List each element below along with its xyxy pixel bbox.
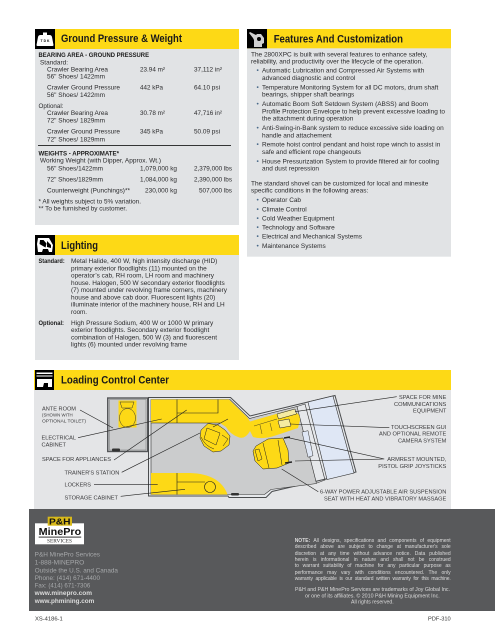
standard lighting text: room. <box>71 309 87 316</box>
icon: control center <box>35 370 54 390</box>
contact details: P&H MinePro Services <box>35 552 100 559</box>
main cab shell <box>148 396 356 498</box>
bearing area table: Crawler Ground Pressure <box>47 85 120 92</box>
note text block: to warrant suitability of machine for any particular purpose as <box>295 563 451 569</box>
features list <box>256 68 445 173</box>
weights table: Counterweight (Punchings)** <box>47 187 130 194</box>
trademark notice <box>295 587 450 606</box>
features list: Profile Protection Envelope to help prevent excessive loading to <box>262 108 445 115</box>
bearing area table: 37,112 in² <box>194 67 223 74</box>
icon: weight: TDK <box>40 39 50 43</box>
standard lighting text: house. Halogen, 500 W secondary exterior floodlights <box>71 280 225 287</box>
bearing area table: 56" Shoes/ 1422mm <box>47 74 105 81</box>
label: electrical cabinet: CABINET <box>42 443 67 449</box>
standard lighting text: Standard: <box>38 258 65 265</box>
icon: weight <box>35 29 55 49</box>
heading: lighting: Lighting <box>61 240 98 252</box>
customization list: Technology and Software <box>262 225 335 232</box>
label: armrest joysticks: PISTOL GRIP JOYSTICKS <box>378 464 447 470</box>
features list: • <box>256 68 260 75</box>
customization list: • <box>256 206 260 213</box>
features list: advanced diagnostic and control <box>262 75 356 82</box>
features intro: The 2800XPC is built with several features to enhance safety, <box>251 51 427 58</box>
label: trainer's station: TRAINER'S STATION <box>64 470 119 476</box>
customization list: • <box>256 215 260 222</box>
bearing area table: 64.10 psi <box>194 85 221 92</box>
note text block <box>294 538 451 582</box>
optional lighting text <box>38 320 217 349</box>
label: ante room: (SHOWN WITH <box>42 412 73 417</box>
features intro: reliability, and productivity over the lifecycle of the operation. <box>251 59 423 66</box>
label: ante room <box>42 407 87 423</box>
bearing area table: Crawler Bearing Area <box>47 110 108 117</box>
contact details: Fax: (414) 671-7306 <box>35 583 91 590</box>
bearing area table: 50.09 psi <box>194 128 221 135</box>
customization intro <box>251 180 429 195</box>
bearing area table: Crawler Bearing Area <box>47 67 108 74</box>
customization list <box>256 197 363 250</box>
customization list: • <box>256 197 260 204</box>
contact details: 1-888-MINEPRO <box>35 560 84 567</box>
bearing area table: Optional: <box>38 103 64 110</box>
yellow console and cabinets <box>151 400 300 494</box>
leader lines <box>78 397 397 496</box>
customization intro: specific conditions in the following areas: <box>251 188 368 195</box>
weights table: 56" Shoes/1422mm <box>47 165 103 172</box>
weights table: 2,390,000 lbs <box>194 176 233 183</box>
features list: • <box>256 125 260 132</box>
label: ante room: ANTE ROOM <box>42 407 77 413</box>
logo: P&H MinePro Services <box>35 517 84 545</box>
optional lighting text: Optional: <box>38 320 64 327</box>
bearing area table: 23.94 m² <box>140 67 166 74</box>
customization list: Operator Cab <box>262 197 301 204</box>
label: ante room: OPTIONAL TOILET) <box>42 418 87 423</box>
weights table: 507,000 lbs <box>199 187 233 194</box>
features list: Temperature Monitoring System for all DC motors, drum shaft <box>262 84 438 91</box>
standard lighting text: (7) mounted under revolving frame corners, machinery <box>71 287 228 294</box>
features list: and dust repression <box>262 166 319 173</box>
features list: the attachment during operation <box>262 116 354 123</box>
optional lighting text: lights (6) mounted under revolving frame <box>71 342 187 349</box>
weights table: 1,084,000 kg <box>140 176 177 183</box>
standard lighting text: Metal Halide, 400 W, high intensity discharge (HID) <box>71 258 217 265</box>
footer band <box>29 509 495 611</box>
label: storage cabinet: STORAGE CABINET <box>64 496 119 502</box>
trainer's seat <box>200 424 230 452</box>
bearing area table: 72" Shoes/ 1829mm <box>47 117 105 124</box>
ante room <box>108 398 148 452</box>
diagram: cab floor plan <box>108 396 356 498</box>
weights table: WEIGHTS - APPROXIMATE* <box>38 151 120 158</box>
standard lighting text <box>38 258 228 316</box>
panel: loading control center <box>34 370 451 509</box>
bearing area table: 56" Shoes/ 1422mm <box>47 92 105 99</box>
customization list: Cold Weather Equipment <box>262 215 334 222</box>
logo: P&H MinePro Services: MinePro <box>39 526 81 538</box>
features list: bearings, shipper shaft bearings <box>262 92 355 99</box>
icon: shovel <box>247 29 267 48</box>
label: space for mine communications equipment: SPACE FOR MINE <box>399 395 447 401</box>
document code right: PDF-310 <box>428 616 451 622</box>
document code left: XS-4186-1 <box>35 616 63 622</box>
bearing area table: 47,716 in² <box>194 110 223 117</box>
standard lighting text: primary exterior floodlights (11) mounted on the <box>71 265 207 272</box>
features list: • <box>256 101 260 108</box>
bearing area table: 72" Shoes/ 1829mm <box>47 136 105 143</box>
contact details <box>34 552 118 605</box>
features list: Automatic Lubrication and Compressed Air Systems with <box>262 68 425 75</box>
label: touchscreen gui: CAMERA SYSTEM <box>398 439 447 445</box>
label: air suspension seat <box>320 489 447 502</box>
icon: lighting <box>35 235 55 255</box>
contact details: www.phmining.com <box>34 598 95 605</box>
customization intro: The standard shovel can be customized for local and minesite <box>251 180 429 187</box>
contact details: www.minepro.com <box>34 590 92 597</box>
features list: Anti-Swing-in-Bank system to reduce excessive side loading on <box>262 125 444 132</box>
label: space for mine communications equipment: EQUIPMENT <box>413 409 447 415</box>
note text block: discretion at any time without advance notice. Data published <box>295 551 451 557</box>
panel: features and customization <box>247 29 451 257</box>
label: space for appliances: SPACE FOR APPLIANCES <box>42 457 111 463</box>
label: lockers: LOCKERS <box>64 483 91 489</box>
label: air suspension seat: 6-WAY POWER ADJUSTABLE AIR SUSPENSION <box>320 489 446 495</box>
panel: lighting <box>35 235 239 360</box>
customization list: • <box>256 243 260 250</box>
bearing area table: BEARING AREA - GROUND PRESSURE <box>38 52 149 59</box>
features list: • <box>256 142 260 149</box>
bearing area table: Standard: <box>40 59 68 66</box>
label: touchscreen gui: TOUCHSCREEN GUI <box>391 425 446 431</box>
footnotes <box>38 198 141 213</box>
note text block: warranty applicable is our standard written warranty for this machine. <box>295 576 451 582</box>
weights table: 230,000 kg <box>145 187 177 194</box>
features list: safe and efficient rope changeouts <box>262 149 362 156</box>
features list: Remote hoist control pendant and hoist rope winch to assist in <box>262 142 441 149</box>
weights table <box>38 151 233 194</box>
bearing area table: 345 kPa <box>140 128 163 135</box>
label: space for mine communications equipment: COMMUNICATIONS <box>394 402 447 408</box>
trademark notice: or one of its affiliates. © 2010 P&H Mining Equipment Inc. <box>305 592 440 599</box>
heading: features and customization: Features And Customization <box>274 34 403 46</box>
features list: • <box>256 84 260 91</box>
standard lighting text: illuminate interior of the machinery house, RH and LH <box>71 302 225 309</box>
bearing area table: Crawler Ground Pressure <box>47 128 120 135</box>
operator's seat <box>253 437 292 469</box>
optional lighting text: combination of Halogen, 500 W (3) and fluorescent <box>71 334 217 341</box>
heading: ground pressure and weight: Ground Pressure & Weight <box>61 33 182 45</box>
contact details: Outside the U.S. and Canada <box>35 567 118 574</box>
footnotes: * All weights subject to 5% variation. <box>38 198 141 205</box>
label: touchscreen gui: AND OPTIONAL REMOTE <box>379 432 447 438</box>
weights table: 2,379,000 lbs <box>194 165 233 172</box>
note text block: described above are subject to change at manufacturer's sole <box>295 544 451 550</box>
label: air suspension seat: SEAT WITH HEAT AND VIBRATORY MASSAGE <box>324 496 447 502</box>
logo: P&H MinePro Services: P&H <box>49 517 70 527</box>
customization list: Climate Control <box>262 206 307 213</box>
trademark notice: All rights reserved. <box>351 600 394 606</box>
footnotes: ** To be furnished by customer. <box>38 206 127 213</box>
features list: • <box>256 158 260 165</box>
label: space for mine communications equipment <box>394 395 447 415</box>
features list: handle and attachement <box>262 132 332 139</box>
features list: Automatic Boom Soft Setdown System (ABSS) and Boom <box>262 101 428 108</box>
logo: P&H MinePro Services: SERVICES <box>47 540 72 545</box>
customization list: Maintenance Systems <box>262 243 326 250</box>
standard lighting text: operator’s cab, RH room, LH room and machinery <box>71 273 215 280</box>
heading: loading control center: Loading Control Center <box>61 374 170 386</box>
note text block: herein is informational in nature and shall not be construed <box>295 557 451 563</box>
panel: ground pressure and weight <box>35 29 239 225</box>
bearing area table: 442 kPa <box>140 85 163 92</box>
features list: House Pressurization System to provide filtered air for cooling <box>262 158 439 165</box>
customization list: Electrical and Mechanical Systems <box>262 234 363 241</box>
optional lighting text: High Pressure Sodium, 400 W or 1000 W primary <box>71 320 214 327</box>
customization list: • <box>256 225 260 232</box>
label: electrical cabinet <box>42 436 76 449</box>
bearing area table: 30.78 m² <box>140 110 166 117</box>
standard lighting text: house and above cab door. Fluorescent lights (20) <box>71 294 215 301</box>
optional lighting text: exterior floodlights. Secondary exterior floodlight <box>71 327 209 334</box>
label: armrest joysticks: ARMREST MOUNTED, <box>387 457 447 463</box>
bearing area table <box>38 52 223 143</box>
contact details: Phone: (414) 671-4400 <box>35 575 100 582</box>
trademark notice: P&H and P&H MinePro Services are trademarks of Joy Global Inc. <box>295 587 450 593</box>
customization list: • <box>256 234 260 241</box>
label: armrest joysticks <box>378 457 447 470</box>
weights table: Working Weight (with Dipper, Approx. Wt.) <box>40 158 161 165</box>
label: electrical cabinet: ELECTRICAL <box>42 436 76 442</box>
weights table: 1,079,000 kg <box>140 165 177 172</box>
features intro <box>251 51 427 66</box>
note text block: NOTE: All designs, specifications and components of equipment <box>295 538 451 544</box>
label: touchscreen gui <box>379 425 447 445</box>
weights table: 72" Shoes/1829mm <box>47 176 103 183</box>
note text block: performance may vary with conditions encountered. The only <box>295 570 451 576</box>
